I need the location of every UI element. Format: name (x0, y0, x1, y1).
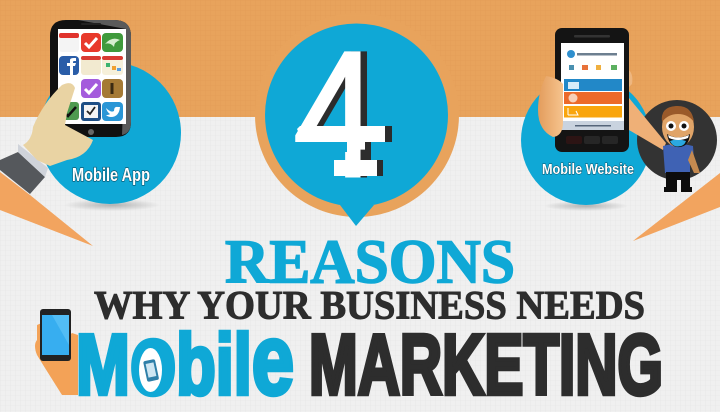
icon: hand holding phone with suit sleeve (0, 83, 93, 194)
label: Mobile Website: Mobile Website (542, 162, 634, 178)
blue circle (521, 75, 651, 205)
panel: mobile app (0, 20, 181, 211)
head (662, 107, 694, 147)
numeral 4: 4 (300, 15, 385, 215)
icon: phone inside letter o (143, 359, 159, 382)
circle shadow (64, 199, 160, 211)
orange ring (255, 13, 459, 217)
right orange speech spike (633, 173, 720, 241)
app icons (59, 33, 123, 121)
icon: finger behind phone (626, 68, 632, 90)
icon: cartoon character pointing (629, 98, 700, 192)
legs (664, 172, 692, 192)
panel: mobile website (521, 28, 717, 211)
panel: number 4 badge (255, 13, 459, 226)
icon: smartphone with website (555, 28, 629, 152)
dark circle behind character (637, 100, 717, 180)
white hole in letter o (139, 348, 162, 392)
blue circle with pointer (265, 24, 448, 206)
icon: smartphone with apps (50, 20, 131, 137)
arm (629, 98, 666, 150)
left orange speech spike (0, 172, 93, 246)
icon: hand fingers over phone edge (538, 76, 563, 137)
heading: why your business needs: WHY YOUR BUSINESS NEEDS (94, 282, 645, 328)
body (663, 144, 694, 173)
icon: hand holding small phone (35, 309, 78, 395)
label: Mobile App: Mobile App (72, 165, 150, 185)
blue circle (39, 62, 181, 204)
numeral 4: 4 (293, 15, 379, 215)
heading: REASONS: REASONS (225, 228, 515, 296)
circle shadow (544, 201, 628, 211)
